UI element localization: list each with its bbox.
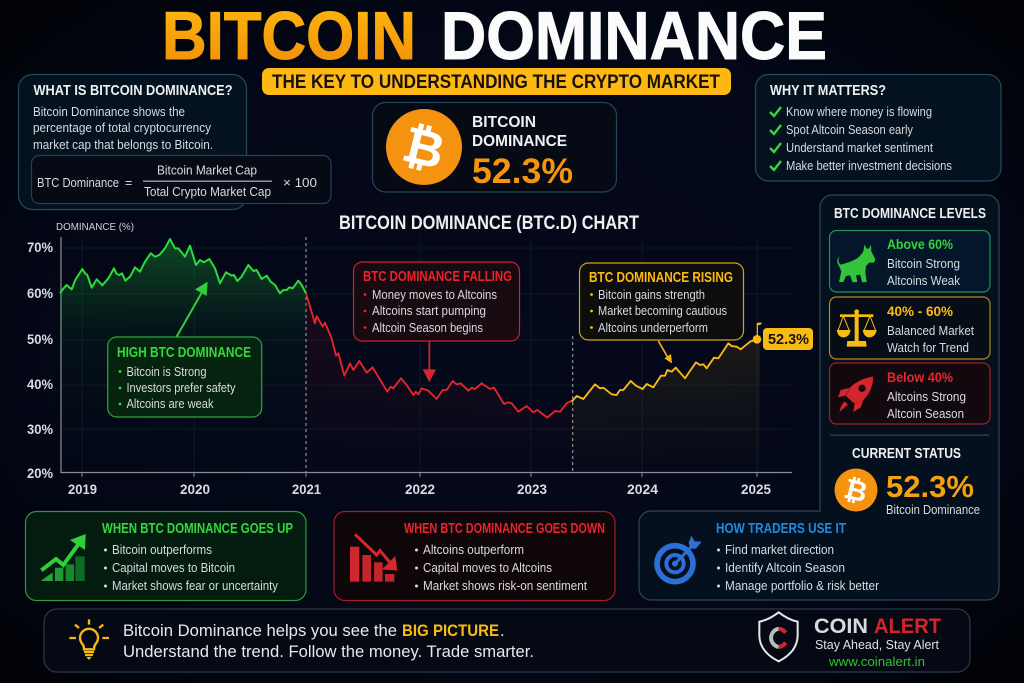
- logo: coin alert: COIN: [814, 615, 868, 638]
- callout: BTC dominance rising: BTC DOMINANCE RISING: [589, 270, 733, 286]
- level: below 40: Below 40%: [887, 369, 953, 385]
- footer message: Bitcoin Dominance helps you see the: [123, 622, 397, 640]
- current status: CURRENT STATUS: [852, 446, 961, 462]
- panel: how traders use it: [657, 521, 879, 593]
- formula box: Bitcoin Market Cap: [157, 164, 257, 178]
- checklist: Understand market sentiment: [786, 141, 933, 155]
- panel: when dominance goes up: Bitcoin outperforms: [112, 543, 212, 557]
- callout: high BTC dominance: Altcoins are weak: [126, 397, 214, 411]
- panel: when dominance goes down: WHEN BTC DOMINANCE GOES DOWN: [404, 521, 605, 537]
- callout: BTC dominance falling: BTC DOMINANCE FALLING: [363, 269, 512, 285]
- formula box: BTC Dominance: [37, 176, 119, 190]
- panel: when dominance goes up: [26, 512, 306, 600]
- axis labels: 40%: [27, 376, 54, 392]
- panel: why it matters: [756, 74, 1001, 181]
- panel: how traders use it: Find market direction: [725, 543, 834, 557]
- arrow: to falling segment: [423, 342, 436, 382]
- panel: how traders use it: Manage portfolio & risk better: [725, 579, 879, 593]
- icon: scales: [837, 309, 877, 347]
- definition text: market cap that belongs to Bitcoin.: [33, 138, 213, 152]
- axis labels: 2024: [627, 481, 658, 497]
- heading: what is: WHAT IS BITCOIN DOMINANCE?: [34, 82, 232, 99]
- green segment: [60, 239, 306, 472]
- current status: Bitcoin Dominance: [886, 503, 980, 517]
- chart: BTC dominance line: [27, 221, 792, 497]
- callout: high BTC dominance: [108, 337, 262, 417]
- callout: BTC dominance falling: [354, 262, 520, 341]
- panel: why it matters: WHY IT MATTERS?: [770, 82, 886, 99]
- level: below 40: [830, 363, 990, 424]
- definition text: Bitcoin Dominance shows the: [33, 105, 185, 119]
- icon: bull: [837, 245, 875, 282]
- axis labels: 2023: [517, 481, 547, 497]
- title: DOMINANCE: [441, 0, 827, 74]
- level: above 60: [830, 230, 990, 292]
- axis labels: 2025: [741, 481, 771, 497]
- level: above 60: Above 60%: [887, 236, 953, 252]
- icon: bitcoin coin: ₿: [397, 115, 451, 181]
- level: above 60: Bitcoin Strong: [887, 257, 960, 271]
- panel: BTC dominance levels: BTC DOMINANCE LEVELS: [834, 206, 986, 222]
- panel: bitcoin dominance value: [372, 102, 616, 192]
- callout: BTC dominance rising: [580, 263, 744, 340]
- panel: levels and traders frame: [639, 195, 999, 600]
- axis labels: 60%: [27, 285, 54, 301]
- formula box: =: [125, 176, 132, 190]
- level: 40 to 60: [830, 297, 990, 359]
- current value tag: [763, 328, 813, 350]
- formula box: Total Crypto Market Cap: [144, 185, 271, 199]
- level: 40 to 60: 40% - 60%: [887, 303, 954, 319]
- icon: bitcoin coin small: [834, 468, 878, 512]
- icon: rocket: [838, 377, 873, 412]
- callout: BTC dominance rising: Altcoins underperform: [598, 321, 708, 335]
- panel: when dominance goes up: Market shows fear or uncertainty: [112, 579, 279, 593]
- title: BITCOIN: [162, 0, 416, 74]
- callout: BTC dominance falling: Money moves to Altcoins: [372, 288, 497, 302]
- axis labels: 2022: [405, 481, 435, 497]
- current value tag: 52.3%: [768, 332, 809, 348]
- icon: rising chart: [41, 534, 86, 581]
- panel: when dominance goes down: Altcoins outperform: [423, 543, 524, 557]
- panel: when dominance goes down: [334, 512, 615, 600]
- title: [162, 0, 827, 74]
- logo: coin alert: [759, 612, 941, 669]
- yellow segment: [572, 323, 762, 472]
- logo: coin alert: ALERT: [874, 615, 941, 638]
- formula box: [32, 156, 331, 204]
- panel: BTC dominance levels: [830, 206, 990, 424]
- level: 40 to 60: Watch for Trend: [887, 341, 969, 355]
- axis labels: [27, 221, 771, 497]
- icon: bitcoin coin small: ₿: [841, 472, 871, 509]
- callout: BTC dominance falling: Altcoins start pumping: [372, 304, 486, 318]
- icon: target: [657, 536, 702, 582]
- footer message: [123, 622, 534, 661]
- subtitle banner: THE KEY TO UNDERSTANDING THE CRYPTO MARKET: [272, 72, 720, 93]
- callout: high BTC dominance: Investors prefer safety: [126, 381, 236, 395]
- red segment: [306, 293, 572, 472]
- current status: 52.3%: [886, 469, 974, 504]
- value: 52.3%: [472, 152, 573, 191]
- axis labels: 50%: [27, 331, 54, 347]
- panel: when dominance goes down: Capital moves to Altcoins: [423, 561, 552, 575]
- panel: bitcoin dominance value: BITCOIN: [472, 114, 536, 131]
- footer panel: [44, 609, 970, 672]
- axis labels: 2021: [292, 481, 321, 497]
- level: 40 to 60: Balanced Market: [887, 324, 974, 338]
- panel: what is bitcoin dominance: [18, 74, 246, 210]
- checklist: Know where money is flowing: [786, 105, 932, 119]
- logo: coin alert: www.coinalert.in: [828, 655, 925, 669]
- axis labels: 2020: [180, 481, 210, 497]
- level: below 40: Altcoins Strong: [887, 390, 966, 404]
- panel: when dominance goes up: WHEN BTC DOMINANCE GOES UP: [102, 521, 293, 537]
- arrow: to high dominance: [177, 282, 208, 337]
- panel: when dominance goes down: Market shows risk-on sentiment: [423, 579, 587, 593]
- callout: high BTC dominance: HIGH BTC DOMINANCE: [117, 345, 251, 361]
- checklist: Make better investment decisions: [786, 159, 952, 173]
- current status: [830, 434, 989, 517]
- logo: coin alert: Stay Ahead, Stay Alert: [815, 637, 939, 652]
- icon: falling chart: [350, 534, 397, 582]
- level: below 40: Altcoin Season: [887, 407, 964, 421]
- checklist: Spot Altcoin Season early: [786, 123, 914, 137]
- icon: bitcoin coin: [386, 109, 462, 185]
- panel: how traders use it: Identify Altcoin Season: [725, 561, 845, 575]
- footer message: Understand the trend. Follow the money. Trade smarter.: [123, 643, 534, 661]
- icon: lightbulb: [69, 619, 109, 660]
- icon: shield: [759, 612, 798, 661]
- arrow: to rising segment: [658, 341, 672, 363]
- callout: BTC dominance rising: Market becoming cautious: [598, 304, 727, 318]
- checklist: [770, 105, 952, 173]
- panel: when dominance goes up: Capital moves to Bitcoin: [112, 561, 235, 575]
- callout: BTC dominance falling: Altcoin Season begins: [372, 321, 483, 335]
- axis labels: 2019: [68, 481, 97, 497]
- axis labels: 70%: [27, 239, 54, 255]
- panel: how traders use it: HOW TRADERS USE IT: [716, 521, 846, 537]
- definition text: [33, 105, 213, 152]
- footer message: BIG PICTURE: [402, 622, 499, 640]
- axis labels: DOMINANCE (%): [56, 221, 134, 233]
- formula box: × 100: [283, 176, 317, 190]
- axis labels: 20%: [27, 465, 54, 481]
- footer message: .: [500, 622, 505, 640]
- panel: bitcoin dominance value: DOMINANCE: [472, 133, 567, 150]
- callout: BTC dominance rising: Bitcoin gains strength: [598, 288, 705, 302]
- level: above 60: Altcoins Weak: [887, 274, 961, 288]
- chart title: BITCOIN DOMINANCE (BTC.D) CHART: [339, 213, 639, 234]
- definition text: percentage of total cryptocurrency: [33, 121, 212, 135]
- callout: high BTC dominance: Bitcoin is Strong: [126, 365, 207, 379]
- axis labels: 30%: [27, 421, 54, 437]
